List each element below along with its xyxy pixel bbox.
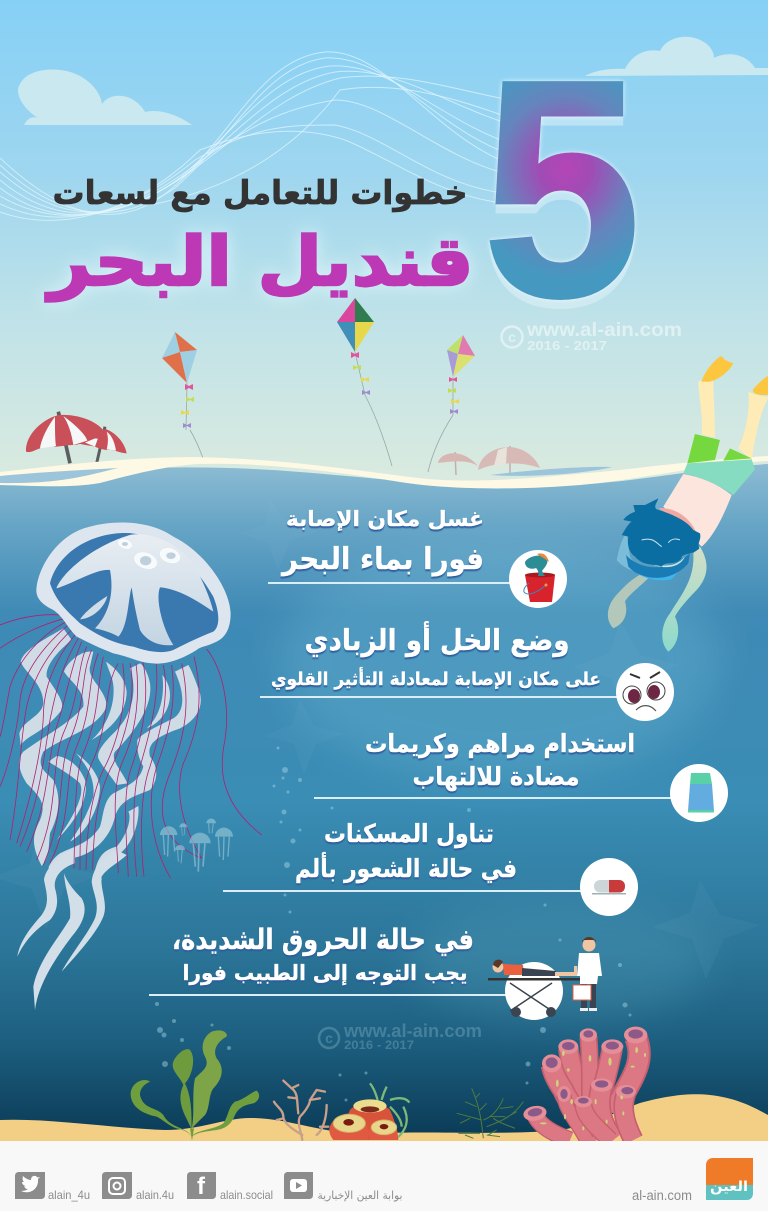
step 3 xyxy=(314,729,728,822)
swimmer hair highlights xyxy=(642,539,680,547)
footer twitter xyxy=(15,1172,90,1202)
footer instagram xyxy=(102,1172,174,1202)
step 2 line xyxy=(260,696,618,698)
jellyfish body xyxy=(0,522,262,1010)
swimmer mask outer xyxy=(617,533,690,575)
footer twitter: alain_4u xyxy=(48,1188,90,1202)
watermark bottom: www.al-ain.com xyxy=(343,1021,482,1041)
step 1 icon circle: bucket with fish xyxy=(509,550,567,608)
title line 1: خطوات للتعامل مع لسعات xyxy=(52,173,468,213)
cloud left xyxy=(18,70,192,125)
step 3 text xyxy=(365,729,635,792)
swimmer mask band xyxy=(626,553,690,578)
sea glow patches xyxy=(280,540,720,1020)
swimmer mask stripe xyxy=(635,572,678,580)
green stalks behind anemone xyxy=(370,1083,409,1138)
footer facebook: alain.social xyxy=(220,1188,273,1202)
footer logo xyxy=(706,1158,753,1200)
sea background xyxy=(0,464,768,1141)
red anemones xyxy=(337,1104,398,1140)
step 4 text: تناول المسكنات xyxy=(324,819,494,849)
footer site name: al-ain.com xyxy=(632,1188,692,1203)
decorative wave lines xyxy=(0,52,530,220)
step 5 text: يجب التوجه إلى الطبيب فورا xyxy=(182,961,468,985)
tiny jellyfish group xyxy=(160,818,233,872)
jellyfish xyxy=(0,522,262,1010)
step 5 line xyxy=(149,994,507,996)
front tubes xyxy=(599,1087,613,1140)
watermark top xyxy=(502,320,682,353)
footer logo: العين xyxy=(710,1179,748,1195)
step 3 text: استخدام مراهم وكريمات xyxy=(365,729,635,759)
kite right xyxy=(447,335,475,414)
swimmer arm right xyxy=(662,547,707,652)
footer youtube: بوابة العين الإخبارية xyxy=(318,1189,402,1202)
watermark bottom: c xyxy=(325,1030,333,1046)
step 1 text xyxy=(280,507,484,577)
tan coral branches xyxy=(274,1081,328,1140)
bubbles xyxy=(155,746,632,1102)
kite strings xyxy=(186,352,453,472)
swimmer hair xyxy=(622,498,700,567)
kite center xyxy=(337,298,374,395)
swimmer mask lens xyxy=(635,550,685,567)
swimmer leg left xyxy=(698,379,715,437)
title line 2: قنديل البحر xyxy=(45,223,473,302)
step 4 text: في حالة الشعور بألم xyxy=(295,852,517,884)
swimmer torso xyxy=(663,474,732,547)
step 1 xyxy=(268,507,567,608)
footer facebook xyxy=(187,1172,273,1202)
swimmer belly xyxy=(658,508,697,533)
step 1 text: فورا بماء البحر xyxy=(280,542,484,577)
watermark top: 2016 - 2017 xyxy=(527,338,607,353)
step 4 icon circle: pill xyxy=(580,858,638,916)
watermark bottom xyxy=(319,1021,482,1052)
jellyfish oral arm bands xyxy=(19,628,201,880)
swimmer arm left xyxy=(608,573,650,628)
step 4 text xyxy=(295,819,517,884)
swimmer leg right xyxy=(738,392,768,460)
jellyfish bell xyxy=(36,522,231,664)
step 5 icon: stretcher and doctor xyxy=(488,937,602,1020)
swimmer fin right xyxy=(753,376,768,395)
swimmer shorts above water xyxy=(687,434,752,463)
step 3 text: مضادة للالتهاب xyxy=(412,762,580,792)
sand xyxy=(0,1094,768,1141)
cloud right xyxy=(585,37,768,76)
footer instagram: alain.4u xyxy=(136,1188,174,1202)
watermark bottom: 2016 - 2017 xyxy=(344,1038,414,1052)
step 2 xyxy=(260,621,674,721)
watermark top: c xyxy=(508,329,516,345)
step 5 text: في حالة الحروق الشديدة، xyxy=(172,923,474,956)
swimmer xyxy=(608,356,768,652)
swimmer fin left xyxy=(702,356,733,382)
step 2 text xyxy=(271,621,601,690)
seaweed xyxy=(131,1030,259,1141)
step 1 text: غسل مكان الإصابة xyxy=(286,507,484,531)
jellyfish slit xyxy=(80,596,107,619)
step 2 text: على مكان الإصابة لمعادلة التأثير القلوي xyxy=(271,667,601,690)
dark green bush xyxy=(457,1088,523,1138)
step 1 line xyxy=(268,582,513,584)
back tubes xyxy=(568,1048,580,1120)
tube openings xyxy=(522,1027,647,1123)
sky background xyxy=(0,0,768,490)
step 4 line xyxy=(223,890,583,892)
surface water patches xyxy=(0,467,612,483)
footer background xyxy=(0,1141,768,1211)
footer youtube xyxy=(284,1172,402,1202)
footer facebook: f xyxy=(197,1173,206,1200)
beach umbrellas far xyxy=(438,446,540,475)
beach umbrellas left xyxy=(26,412,127,463)
step 4 xyxy=(223,819,638,916)
faint star patterns xyxy=(0,500,760,979)
step 3 icon circle: cream tube xyxy=(670,764,728,822)
tube coral xyxy=(522,1027,647,1140)
big number 5: 5 xyxy=(483,25,641,370)
kite left xyxy=(162,332,197,428)
jellyfish inner bell xyxy=(50,533,218,652)
step 5 xyxy=(149,923,602,1020)
tube spots xyxy=(540,1047,646,1130)
water surface cream wave xyxy=(0,456,768,488)
jellyfish bell pattern xyxy=(57,534,213,645)
big number 5: 5 xyxy=(483,16,641,361)
step 2 icon circle: sad face xyxy=(616,663,674,721)
step 3 line xyxy=(314,797,672,799)
step 5 text xyxy=(172,923,474,985)
watermark top: www.al-ain.com xyxy=(526,320,682,341)
step 2 text: وضع الخل أو الزبادي xyxy=(304,621,570,657)
jellyfish tails xyxy=(17,848,127,1010)
jellyfish tentacles xyxy=(0,615,262,878)
coral branches and anemones xyxy=(274,1081,409,1140)
jellyfish spots xyxy=(117,538,182,571)
swimmer shorts under water xyxy=(683,459,755,495)
